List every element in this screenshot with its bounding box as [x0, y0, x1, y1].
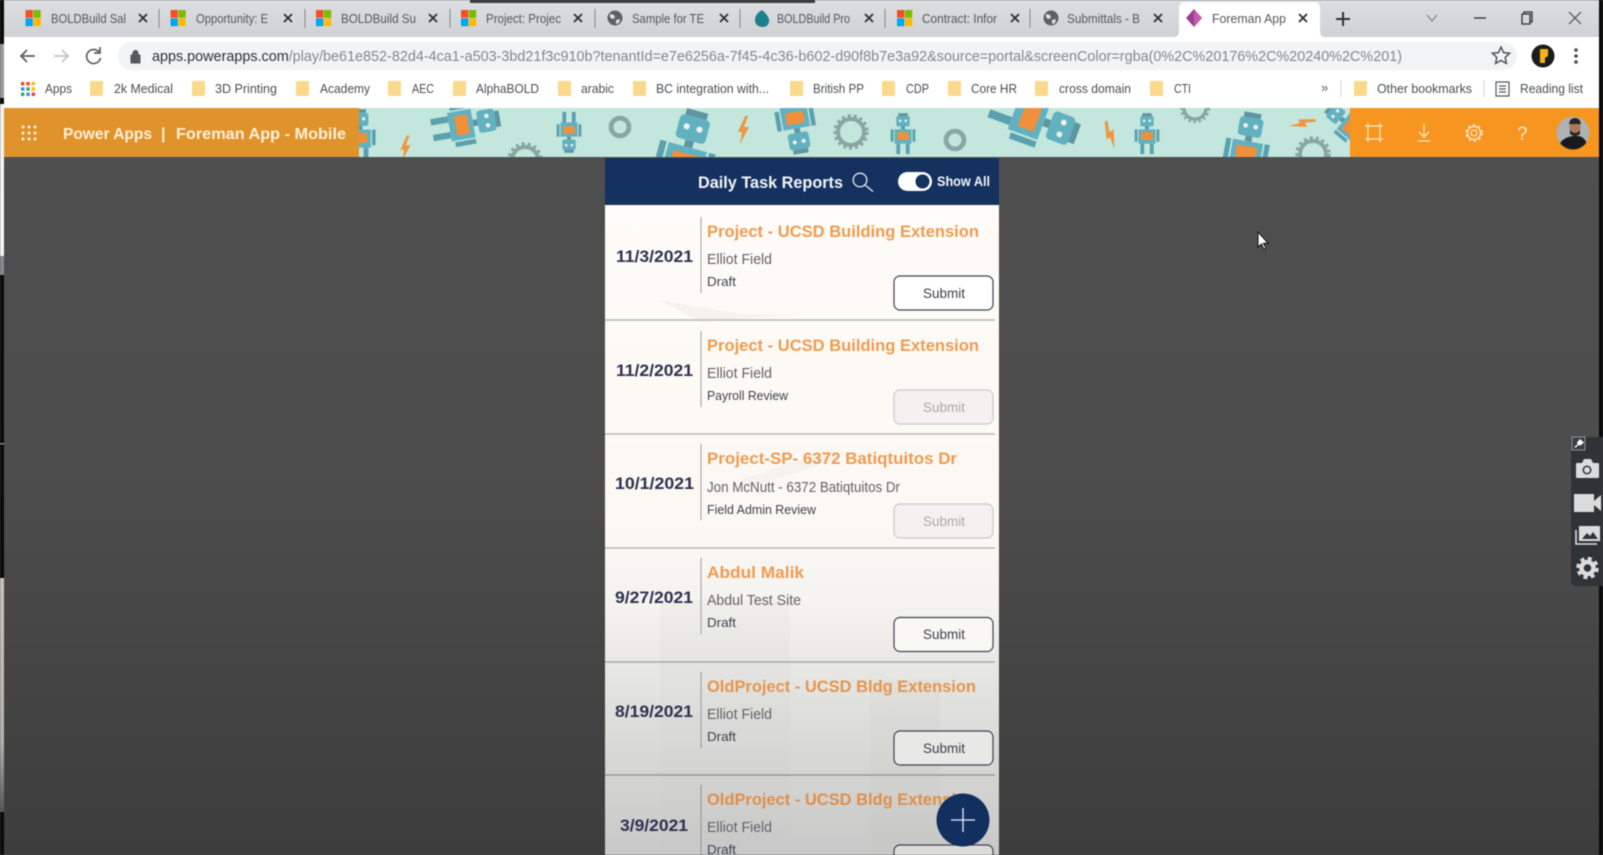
task row 6: 3/9/2021: [620, 817, 688, 835]
tab: Project: [461, 10, 582, 26]
tab: Contract: [897, 10, 1019, 26]
address toolbar: [4, 37, 1599, 72]
bookmark: Core HR: Core HR: [971, 81, 1017, 96]
bookmark: 2k Medical: [90, 81, 173, 96]
reading list: Reading list: [1520, 81, 1583, 96]
task row 6: [620, 785, 993, 855]
task row 3: Jon McNutt - 6372 Batiqtuitos Dr: [707, 480, 900, 496]
tab search chevron: [1427, 15, 1437, 21]
menu dots: [1574, 48, 1578, 64]
bookmark: Other bookmarks: Other bookmarks: [1377, 81, 1472, 96]
address pill: [118, 42, 1517, 70]
tab: BOLDBuild Sub: [316, 10, 437, 26]
tab: Project: Project: Projec: [486, 11, 561, 26]
tab: BOLDBuild Pro: [755, 10, 873, 27]
tab: BOLDBuild Pro: BOLDBuild Pro: [777, 11, 850, 26]
show all toggle: [898, 172, 932, 191]
left orange title block: [4, 108, 359, 157]
left edge strip: [0, 0, 4, 855]
task row 1: [605, 217, 995, 320]
window restore: [1522, 12, 1532, 24]
bookmarks bar: [4, 72, 1599, 108]
tab: Sample for TE: Sample for TE: [632, 11, 704, 26]
task row 5: 8/19/2021: [615, 703, 693, 721]
bookmark divider: [1341, 80, 1484, 97]
task row 3: Submit: [923, 514, 965, 529]
bookmark: BC integration: BC integration with...: [656, 81, 769, 96]
task row 1: Elliot Field: [707, 252, 772, 268]
bookmark: Apps: Apps: [45, 81, 72, 96]
reload icon: [87, 47, 100, 64]
star icon: [1492, 47, 1510, 63]
search icon: [853, 173, 873, 192]
bookmark: CTI: [1150, 81, 1191, 96]
pin icon: [1572, 437, 1585, 450]
right orange action block: [1350, 108, 1599, 157]
task row 4: Draft: [707, 616, 737, 630]
tab: Submittals: [1044, 10, 1162, 26]
bookmark: AlphaBOLD: [453, 81, 539, 96]
bookmark overflow chevrons: »: [1321, 80, 1328, 95]
floating add button: [936, 794, 990, 846]
bookmark: cross domain: cross domain: [1059, 81, 1131, 96]
task row 3: 10/1/2021: [615, 475, 694, 493]
bookmark: AlphaBOLD: AlphaBOLD: [476, 81, 539, 96]
app title: [63, 126, 346, 143]
task list background: [605, 205, 999, 855]
bookmark: CDP: [882, 81, 929, 96]
bookmark: British PP: British PP: [813, 81, 864, 96]
bookmark: 3D Printing: 3D Printing: [215, 81, 277, 96]
reading list: [1496, 81, 1583, 96]
task row 4: [605, 558, 995, 662]
mouse cursor: [1258, 232, 1268, 250]
tab: Submittals: Submittals - B: [1067, 11, 1140, 26]
bookmark: Core HR: [948, 81, 1017, 96]
task row 1: Submit: [923, 286, 965, 301]
toggle label: Show All: [937, 174, 990, 189]
bookmark: arabic: arabic: [581, 81, 614, 96]
task row 3: Field Admin Review: [707, 503, 817, 517]
new tab plus: [1336, 12, 1350, 26]
gallery icon: [1576, 526, 1600, 544]
task row 1: Project - UCSD Building Extension: [707, 222, 979, 241]
app title: Power Apps: [63, 126, 152, 143]
power apps header bar: [3, 107, 1600, 158]
apps grid icon: [21, 82, 35, 96]
robot banner: [358, 107, 1351, 158]
task row 4: Abdul Test Site: [707, 593, 801, 609]
bookmark: arabic: [558, 81, 614, 96]
back arrow: [21, 50, 35, 62]
bookmark: CTI: CTI: [1174, 81, 1191, 96]
phone app panel: [605, 158, 999, 855]
active tab background: [1174, 2, 1325, 37]
app title: |: [161, 126, 165, 143]
window minimize: [1474, 17, 1486, 19]
tab: BOLDBuild Sales: [26, 10, 147, 26]
task row 5: Submit: [923, 741, 965, 756]
settings gear icon: [1578, 558, 1597, 578]
task row 4: Submit: [923, 627, 965, 642]
lock icon: [131, 50, 140, 63]
profile avatar: [1532, 44, 1554, 68]
task row 2: Project - UCSD Building Extension: [707, 336, 979, 355]
task row 3: Project-SP- 6372 Batiqtuitos Dr: [707, 449, 957, 468]
task row 5: [605, 672, 995, 775]
app title: Foreman App - Mobile: [176, 126, 346, 143]
waffle icon: [22, 126, 36, 140]
task row 4: Abdul Malik: [707, 563, 805, 582]
bookmark: Academy: Academy: [320, 81, 370, 96]
task row 2: Submit: [923, 400, 965, 415]
task row 6: Elliot Field: [707, 820, 772, 836]
task row 4: 9/27/2021: [615, 589, 693, 607]
screen capture side toolbar: [1571, 437, 1603, 586]
task row 1: Draft: [707, 275, 737, 289]
task row 2: 11/2/2021: [616, 362, 693, 380]
tab: Opportunity: Opportunity: E: [196, 11, 268, 26]
fit icon: [1365, 123, 1383, 142]
browser tab strip: [4, 0, 1599, 37]
tab: BOLDBuild Sales: BOLDBuild Sal: [51, 11, 126, 26]
tab: Foreman App (active): [1186, 9, 1307, 27]
download icon: [1418, 124, 1430, 141]
bookmark: Academy: [296, 81, 370, 96]
user avatar: [1556, 116, 1590, 152]
heading: Daily Task Reports: [698, 173, 843, 192]
help icon: ?: [1517, 124, 1528, 145]
task row 1: 11/3/2021: [616, 248, 693, 266]
task row 3: [605, 444, 995, 548]
camera icon: [1576, 459, 1599, 478]
url text: apps.powerapps.com/play/be61e852-82d4-4ca1-a503-3bd21f3c910b?tenantId=e7e6256a-7f45-4c36-b602-d90f8b7e3a92&source=portal&screenColor=rgba(0%2C%20176%2C%20240%2C%201): [152, 49, 1402, 65]
bookmark: AEC: [388, 81, 434, 96]
tab: Foreman App (active): Foreman App: [1212, 11, 1286, 26]
bookmark: 2k Medical: 2k Medical: [114, 81, 173, 96]
task row 5: OldProject - UCSD Bldg Extension: [707, 677, 976, 696]
tab: Contract: Contract: Infor: [922, 11, 998, 26]
tab separators: [159, 9, 1030, 28]
task row 2: Elliot Field: [707, 366, 772, 382]
settings icon: [1466, 125, 1482, 141]
right black edge: [1599, 0, 1603, 855]
window close: [1569, 12, 1581, 24]
bookmark: CDP: CDP: [906, 81, 929, 96]
tab: Sample for TE: [608, 10, 728, 26]
task row 2: Payroll Review: [707, 389, 789, 403]
tab: Opportunity: [170, 10, 292, 26]
forward arrow: [54, 50, 68, 62]
task row 6: OldProject - UCSD Bldg Extension: [707, 790, 976, 809]
task row 2: [605, 331, 995, 434]
bookmark: AEC: AEC: [412, 81, 434, 96]
task row 5: Elliot Field: [707, 707, 772, 723]
panel header: [605, 158, 999, 206]
task row 5: Draft: [707, 730, 737, 744]
tab: BOLDBuild Sub: BOLDBuild Su: [341, 11, 416, 26]
video icon: [1574, 494, 1601, 512]
bookmark: British PP: [790, 81, 864, 96]
